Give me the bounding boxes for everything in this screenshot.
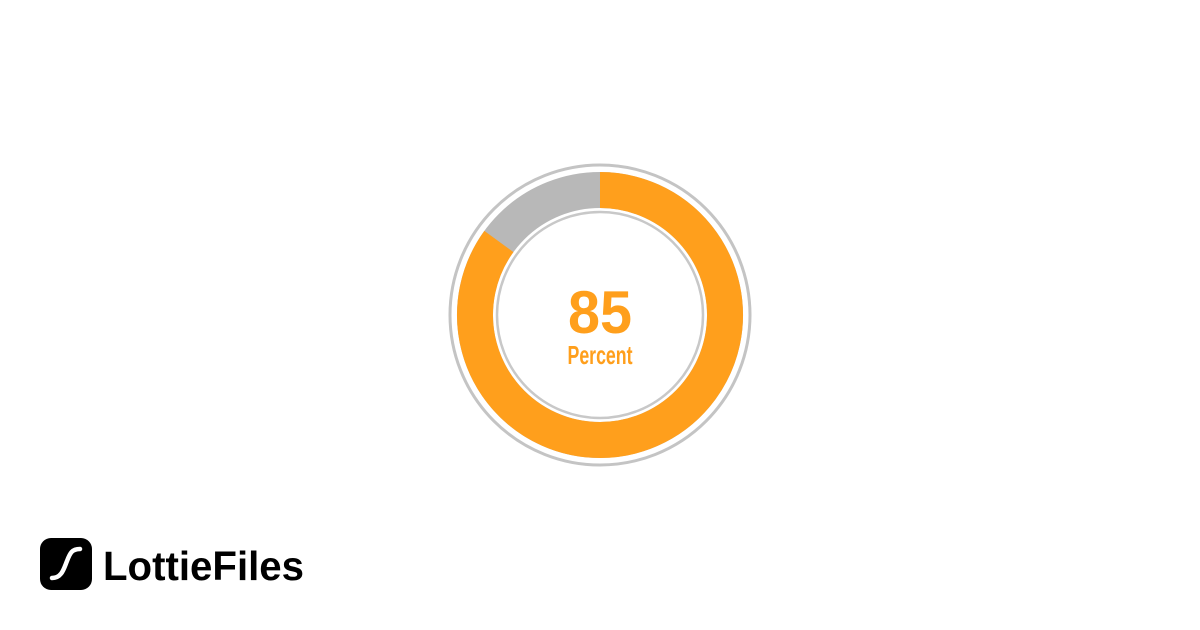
icon: logo square	[40, 538, 92, 590]
orange value arc 85%	[475, 190, 725, 440]
label: Percent: Percent	[568, 340, 633, 370]
donut chart	[450, 165, 750, 465]
value text: 85	[568, 279, 632, 346]
logo: LottieFiles	[40, 538, 304, 590]
outer ring	[450, 165, 750, 465]
gray remainder segment	[475, 190, 725, 440]
logo text: LottieFiles	[103, 543, 304, 589]
inner ring	[497, 212, 703, 418]
